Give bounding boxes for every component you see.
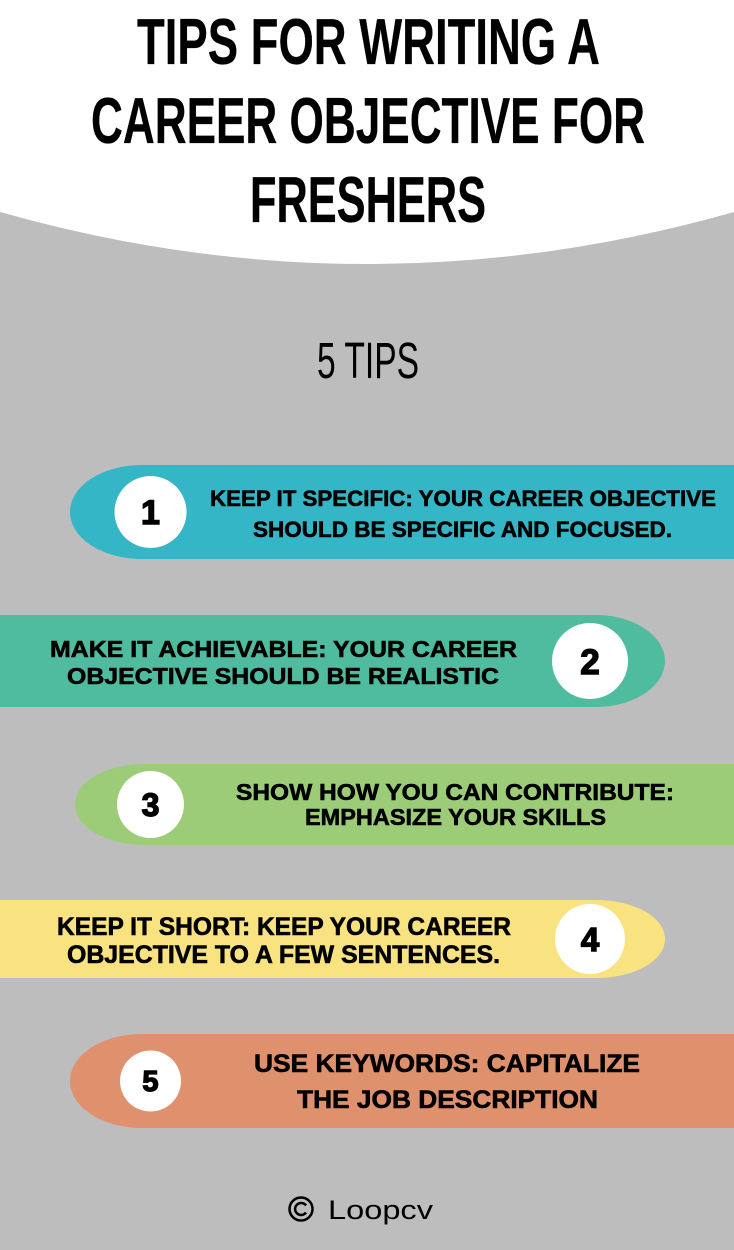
tip 4 text [57, 913, 511, 969]
icon: number 4 badge: 4 [581, 921, 600, 958]
tip 1 text: SHOULD BE SPECIFIC AND FOCUSED. [253, 517, 672, 542]
panel: tip 3 [75, 764, 734, 845]
icon: number 3 badge [117, 771, 184, 838]
tip 3 text [236, 779, 674, 830]
icon: number 2 badge: 2 [580, 643, 600, 682]
icon: number 1 badge: 1 [141, 494, 160, 532]
panel: tip 1 [70, 465, 734, 559]
panel: tip 4 [0, 900, 665, 978]
title [91, 5, 645, 236]
tip 2 text [50, 636, 517, 689]
tip 4 text: KEEP IT SHORT: KEEP YOUR CAREER [57, 913, 511, 941]
tip 4 text: OBJECTIVE TO A FEW SENTENCES. [67, 941, 500, 969]
icon: copyright symbol [290, 1198, 312, 1220]
icon: number 5 badge: 5 [142, 1066, 159, 1098]
icon: number 5 badge [120, 1050, 181, 1112]
tip 5 text: THE JOB DESCRIPTION [297, 1086, 598, 1114]
icon: number 4 badge [555, 904, 625, 974]
brand name: Loopcv [328, 1195, 434, 1225]
tip 3 text: EMPHASIZE YOUR SKILLS [305, 804, 606, 830]
tip 2 text: OBJECTIVE SHOULD BE REALISTIC [67, 663, 499, 689]
icon: number 2 badge [552, 623, 628, 699]
tip 1 text: KEEP IT SPECIFIC: YOUR CAREER OBJECTIVE [210, 486, 716, 511]
tip 2 text: MAKE IT ACHIEVABLE: YOUR CAREER [50, 636, 517, 662]
icon: number 1 badge [114, 476, 186, 548]
panel: tip 2 [0, 615, 665, 707]
tip 3 text: SHOW HOW YOU CAN CONTRIBUTE: [236, 779, 674, 805]
tip 5 text: USE KEYWORDS: CAPITALIZE [254, 1050, 640, 1078]
footer: copyright Loopcv [290, 1195, 434, 1225]
panel: tip 5 [70, 1034, 734, 1128]
tip 5 text [254, 1050, 640, 1114]
icon: number 3 badge: 3 [142, 787, 159, 823]
header panel: white curved top [0, 0, 734, 264]
subheading: 5 tips: 5 TIPS [317, 332, 419, 389]
tip 1 text [210, 486, 716, 542]
title: FRESHERS [250, 163, 486, 236]
